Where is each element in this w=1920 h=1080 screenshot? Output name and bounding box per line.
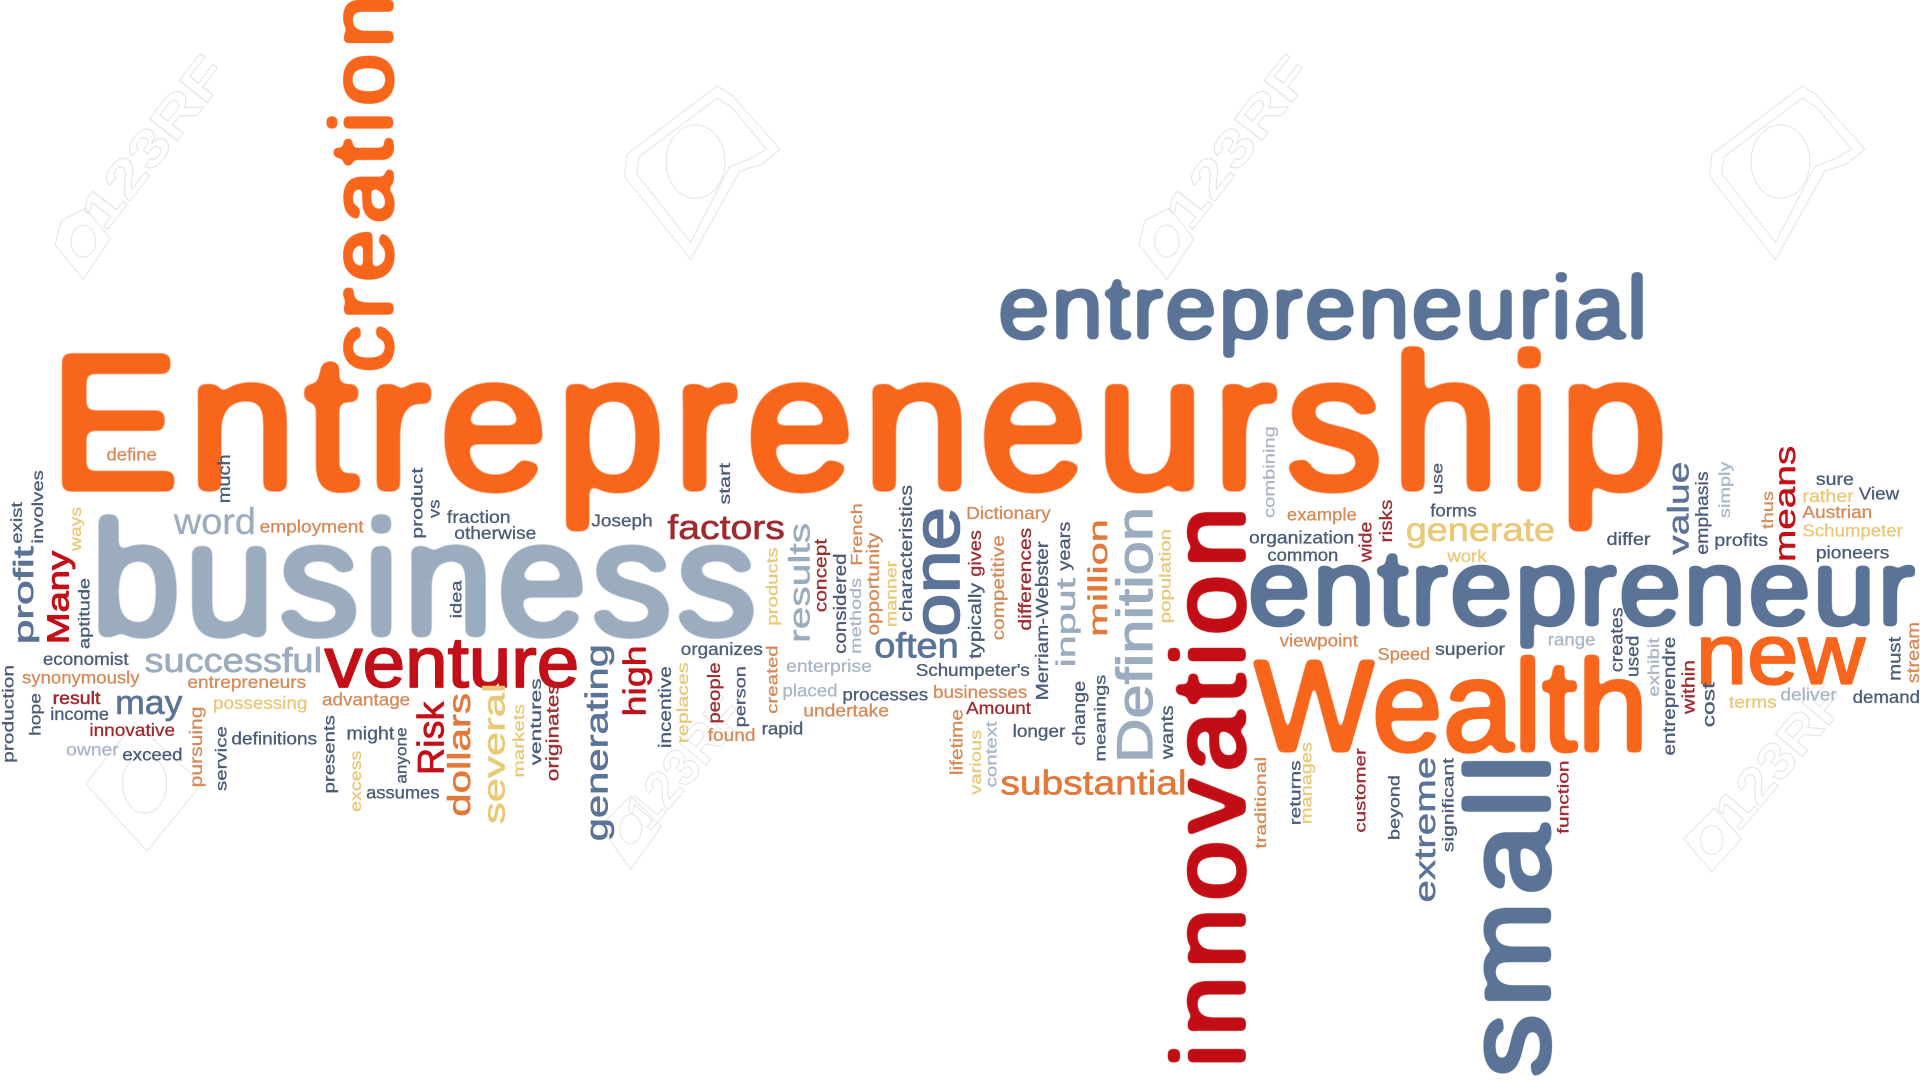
word: owner: owner bbox=[66, 740, 119, 760]
left cluster of small words bbox=[0, 444, 653, 841]
word: define: define bbox=[107, 444, 157, 464]
word: result: result bbox=[53, 688, 101, 708]
word: opportunity: opportunity bbox=[863, 532, 883, 636]
word: start: start bbox=[717, 462, 734, 504]
word: terms: terms bbox=[1729, 692, 1777, 712]
word: otherwise: otherwise bbox=[454, 523, 536, 543]
word: characteristics: characteristics bbox=[896, 485, 916, 622]
word: Joseph: Joseph bbox=[591, 511, 653, 531]
word: differ: differ bbox=[1607, 529, 1651, 549]
word: new: new bbox=[1696, 606, 1866, 702]
word: traditional: traditional bbox=[1253, 757, 1270, 849]
word: businesses: businesses bbox=[933, 682, 1027, 702]
word: profits: profits bbox=[1714, 530, 1768, 550]
word: economist: economist bbox=[43, 649, 129, 669]
word: methods: methods bbox=[848, 578, 865, 654]
word: placed: placed bbox=[782, 681, 838, 701]
word: deliver: deliver bbox=[1780, 684, 1837, 704]
word: concept: concept bbox=[811, 538, 831, 612]
watermark: logo lower right: 123RF bbox=[1703, 671, 1857, 840]
word: dollars: dollars bbox=[441, 693, 477, 817]
word: million: million bbox=[1083, 519, 1113, 637]
word: significant: significant bbox=[1440, 757, 1457, 852]
word: extreme: extreme bbox=[1409, 757, 1442, 902]
word: Schumpeter: Schumpeter bbox=[1802, 520, 1903, 540]
word: innovation: innovation bbox=[1152, 507, 1266, 1068]
word: one: one bbox=[900, 507, 974, 637]
word: organization: organization bbox=[1249, 528, 1354, 548]
word: involves: involves bbox=[30, 470, 47, 544]
word: factors: factors bbox=[667, 509, 785, 547]
word: entrepreneurs: entrepreneurs bbox=[187, 672, 306, 692]
word: exceed: exceed bbox=[122, 744, 182, 764]
word: organizes: organizes bbox=[681, 639, 763, 659]
word: venture: venture bbox=[324, 624, 579, 703]
word: manner: manner bbox=[883, 560, 900, 627]
word: sure: sure bbox=[1816, 469, 1854, 489]
word: wants: wants bbox=[1157, 705, 1177, 760]
word: entreprendre: entreprendre bbox=[1659, 637, 1679, 756]
word: work: work bbox=[1446, 546, 1487, 566]
word: rather: rather bbox=[1802, 486, 1854, 506]
watermark: logo top centre bbox=[1139, 45, 1323, 279]
word: word: word bbox=[173, 501, 256, 542]
word: years: years bbox=[1054, 522, 1074, 571]
word: substantial: substantial bbox=[1000, 765, 1187, 803]
word: View: View bbox=[1859, 484, 1900, 504]
word: lifetime: lifetime bbox=[946, 709, 966, 775]
word: emphasis: emphasis bbox=[1692, 471, 1712, 555]
word: originates: originates bbox=[542, 683, 562, 781]
word: Wealth: Wealth bbox=[1254, 634, 1648, 779]
word: excess: excess bbox=[348, 751, 365, 812]
word: person: person bbox=[733, 666, 750, 727]
watermark: logo lower left bbox=[86, 722, 202, 851]
word: found: found bbox=[708, 725, 756, 745]
word: Many: Many bbox=[42, 550, 76, 644]
word: customer: customer bbox=[1352, 747, 1369, 833]
word: differences: differences bbox=[1015, 528, 1035, 631]
word: markets: markets bbox=[511, 704, 528, 778]
word: competitive: competitive bbox=[988, 535, 1008, 640]
word: synonymously: synonymously bbox=[22, 667, 140, 687]
word: production: production bbox=[0, 665, 17, 763]
word: idea: idea bbox=[449, 580, 466, 618]
word: value: value bbox=[1663, 462, 1696, 555]
watermark: logo lower right bbox=[1684, 671, 1857, 872]
word: entrepreneur: entrepreneur bbox=[1248, 528, 1915, 648]
word: small: small bbox=[1442, 755, 1574, 1078]
word: creates: creates bbox=[1606, 607, 1626, 672]
word: beyond: beyond bbox=[1387, 775, 1404, 840]
word: Austrian: Austrian bbox=[1802, 502, 1872, 522]
word: thus: thus bbox=[1760, 491, 1777, 529]
word: definitions: definitions bbox=[231, 728, 317, 748]
word: hope: hope bbox=[27, 693, 44, 736]
word: people: people bbox=[704, 662, 724, 724]
word: considered: considered bbox=[830, 553, 850, 654]
word: French: French bbox=[849, 503, 866, 566]
watermark: logo lower centre: 123RF bbox=[613, 685, 756, 840]
word: Speed: Speed bbox=[1378, 644, 1430, 664]
word: incentive: incentive bbox=[655, 666, 675, 748]
word: aptitude: aptitude bbox=[76, 578, 93, 649]
word: several: several bbox=[477, 683, 511, 824]
word: advantage: advantage bbox=[322, 689, 410, 709]
right cluster of small words bbox=[1249, 426, 1920, 756]
word: presents: presents bbox=[321, 715, 338, 793]
word: context: context bbox=[984, 720, 1001, 787]
word: enterprise: enterprise bbox=[786, 656, 872, 676]
word: common: common bbox=[1267, 545, 1338, 565]
word: input: input bbox=[1051, 577, 1081, 667]
word: within: within bbox=[1679, 660, 1699, 715]
word: meanings: meanings bbox=[1093, 675, 1110, 762]
word: service: service bbox=[214, 726, 231, 791]
watermark: logo top left: 123RF bbox=[68, 45, 238, 239]
word: fraction: fraction bbox=[447, 507, 511, 527]
word: created: created bbox=[765, 645, 782, 714]
word: possessing: possessing bbox=[213, 693, 307, 713]
word: returns: returns bbox=[1287, 760, 1304, 825]
word: risks: risks bbox=[1376, 500, 1396, 542]
word: various: various bbox=[968, 730, 985, 795]
word: change: change bbox=[1069, 681, 1089, 746]
word: demand: demand bbox=[1853, 687, 1920, 707]
word: Merriam-Webster: Merriam-Webster bbox=[1032, 541, 1052, 700]
word: might: might bbox=[347, 723, 394, 744]
word: may: may bbox=[115, 684, 183, 722]
word: undertake: undertake bbox=[803, 700, 889, 720]
word: pioneers: pioneers bbox=[1816, 542, 1889, 562]
watermark: egg top right bbox=[1709, 86, 1865, 260]
word: Entrepreneurship: Entrepreneurship bbox=[49, 315, 1668, 530]
word: assumes: assumes bbox=[366, 782, 440, 802]
word: Definition: Definition bbox=[1107, 507, 1163, 763]
word: much: much bbox=[214, 454, 234, 503]
word: population: population bbox=[1158, 529, 1175, 623]
word: often: often bbox=[874, 626, 959, 666]
word: products: products bbox=[765, 547, 782, 626]
word: cost: cost bbox=[1698, 682, 1718, 727]
word: Schumpeter's: Schumpeter's bbox=[916, 660, 1030, 680]
centre cluster of small words bbox=[655, 462, 1573, 902]
word: high: high bbox=[616, 645, 652, 716]
word: generate: generate bbox=[1406, 512, 1555, 549]
word: Dictionary: Dictionary bbox=[966, 503, 1051, 523]
word: use: use bbox=[1429, 463, 1446, 495]
word: results: results bbox=[783, 523, 816, 643]
word: Risk: Risk bbox=[410, 701, 451, 775]
word: vs: vs bbox=[427, 500, 444, 518]
word: ways: ways bbox=[68, 507, 85, 552]
word: range: range bbox=[1548, 629, 1596, 649]
word: creation: creation bbox=[314, 0, 411, 372]
word: must: must bbox=[1884, 636, 1904, 681]
word: gives: gives bbox=[965, 530, 985, 577]
word: rapid: rapid bbox=[762, 719, 803, 739]
watermark: logo top centre: 123RF bbox=[1153, 45, 1323, 239]
word: exist: exist bbox=[9, 501, 26, 544]
word: ventures: ventures bbox=[528, 678, 545, 765]
word: forms: forms bbox=[1430, 501, 1477, 521]
word: wide: wide bbox=[1355, 522, 1375, 563]
watermark: egg top centre bbox=[624, 86, 780, 260]
word: used: used bbox=[1622, 636, 1642, 677]
word: processes: processes bbox=[842, 684, 928, 704]
word: replaces: replaces bbox=[675, 662, 692, 743]
word: Amount: Amount bbox=[966, 698, 1031, 718]
word: product: product bbox=[409, 467, 426, 539]
word: manages: manages bbox=[1298, 742, 1315, 824]
word: example: example bbox=[1287, 504, 1357, 524]
word: business: business bbox=[91, 489, 757, 669]
word: income: income bbox=[50, 704, 109, 724]
word: generating: generating bbox=[578, 644, 614, 841]
watermarks bbox=[55, 45, 1865, 872]
word: anyone: anyone bbox=[394, 727, 411, 784]
watermark: logo top left bbox=[55, 45, 238, 279]
word: pursuing: pursuing bbox=[186, 707, 206, 787]
word: successful: successful bbox=[144, 642, 322, 680]
word: function: function bbox=[1556, 760, 1573, 834]
word: means: means bbox=[1769, 446, 1802, 562]
word: viewpoint: viewpoint bbox=[1280, 631, 1358, 651]
word: profit: profit bbox=[8, 546, 39, 644]
word: simply: simply bbox=[1717, 462, 1734, 518]
word: entrepreneurial: entrepreneurial bbox=[998, 258, 1647, 358]
word: superior: superior bbox=[1435, 639, 1505, 659]
word: combining: combining bbox=[1262, 426, 1279, 518]
word: exhibit: exhibit bbox=[1646, 637, 1663, 697]
word: employment: employment bbox=[260, 517, 364, 537]
word: typically: typically bbox=[965, 582, 985, 659]
word: longer: longer bbox=[1013, 721, 1066, 741]
word: innovative: innovative bbox=[89, 720, 175, 740]
